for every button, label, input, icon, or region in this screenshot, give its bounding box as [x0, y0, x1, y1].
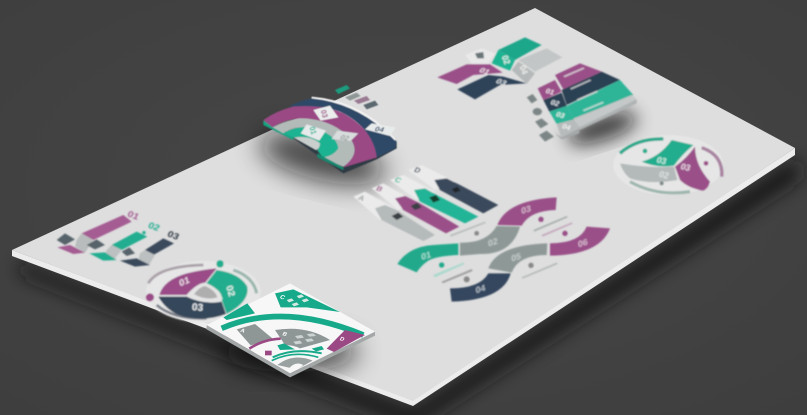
segment 01 teal	[283, 127, 338, 157]
tab A: A	[356, 194, 367, 203]
ribbon icons	[392, 187, 461, 220]
concentric arcs	[273, 351, 322, 357]
purple band	[249, 339, 281, 349]
markers	[146, 293, 154, 301]
segment 03 purple	[497, 197, 557, 226]
segment 01 teal	[397, 243, 458, 272]
teal corner left	[223, 303, 255, 320]
fan chart infographic	[263, 85, 397, 173]
shadow: fan chart	[255, 121, 389, 195]
fan side	[263, 121, 397, 173]
center triangle	[187, 283, 223, 301]
teal arc	[222, 316, 363, 335]
tab B	[372, 183, 415, 210]
panel: gray 04: 04	[517, 64, 531, 76]
step 03: 03	[165, 229, 181, 242]
gray segment A: A	[239, 328, 246, 334]
segment 02 gray: 02	[488, 236, 498, 249]
panel: navy 03: 03	[494, 77, 510, 87]
card with white background	[207, 283, 375, 377]
small blocks behind fan	[335, 85, 378, 109]
panel: purple 01: 01	[477, 66, 493, 76]
tab D	[408, 165, 455, 190]
segment 02 gray	[273, 118, 355, 167]
gray segment B	[275, 329, 330, 348]
circular infographic right	[613, 135, 723, 195]
purple D	[327, 330, 365, 352]
icon: top gears	[465, 48, 495, 63]
teal corner C: C	[278, 294, 287, 301]
right bars	[555, 63, 602, 89]
segment 02 teal: 02	[223, 284, 237, 299]
bottom teal chips	[277, 343, 295, 350]
segment 01 purple: 01	[178, 274, 191, 289]
segment 06 purple: 06	[578, 237, 588, 249]
circular infographic left	[146, 260, 261, 322]
step 01: 01	[125, 209, 141, 223]
segment 03 purple: 03	[521, 203, 531, 216]
stacked block infographic	[527, 63, 637, 142]
icons: gray glyphs	[527, 94, 554, 142]
label 02: 02	[338, 133, 351, 142]
pale disk	[146, 261, 261, 322]
gray segment A	[237, 324, 273, 345]
gray segment B: B	[281, 332, 288, 338]
left steps: 04	[560, 122, 573, 132]
segment 05 gray	[488, 243, 547, 273]
segment 04 navy	[288, 98, 397, 157]
segment 05 gray: 05	[511, 251, 521, 264]
segment 03 purple	[263, 106, 377, 167]
segment 02 gray	[460, 226, 520, 256]
shadow: card	[222, 332, 358, 372]
segment 04 navy: 04	[475, 283, 486, 295]
purple D: D	[338, 337, 345, 343]
label 04: 04	[373, 125, 387, 134]
purple square	[265, 351, 272, 355]
ribbon A gray	[375, 205, 435, 241]
block side	[573, 99, 637, 130]
S-curve infographic	[397, 197, 610, 302]
ribbon D navy	[434, 178, 498, 213]
pale disk	[613, 135, 723, 195]
segment 04 navy	[450, 273, 511, 302]
left stair infographic	[57, 209, 181, 267]
plate shadow	[20, 158, 800, 415]
card face	[207, 283, 375, 373]
step 02: 02	[146, 221, 161, 234]
captions and markers	[433, 216, 573, 283]
teal corner C	[275, 289, 340, 312]
tab C	[390, 175, 435, 200]
bar captions	[563, 67, 604, 111]
tab A	[353, 192, 398, 220]
segment 02 gray: 02	[658, 169, 670, 181]
ribbon B purple	[395, 196, 459, 233]
ribbon infographic	[353, 165, 498, 241]
panel: teal 02: 02	[500, 54, 513, 66]
center gray	[294, 137, 320, 150]
segment 01 purple: 03	[679, 161, 692, 173]
shadow: stacked block	[564, 105, 640, 151]
segment 06 purple	[550, 227, 610, 256]
left steps: 01	[544, 87, 556, 97]
markers	[643, 149, 647, 153]
tab B: B	[374, 184, 385, 194]
card side	[207, 325, 375, 377]
outer rings	[620, 139, 663, 153]
left steps: 03	[554, 110, 566, 120]
segment 01 teal: 01	[421, 249, 431, 262]
tab C: C	[393, 176, 403, 185]
ribbon C teal	[414, 188, 478, 223]
top-right folded infographic	[437, 37, 562, 99]
left steps: 02	[549, 98, 561, 108]
segment 03 navy: 03	[191, 302, 204, 314]
label 03: 03	[319, 109, 330, 119]
outer rings	[148, 265, 203, 283]
left steps	[538, 80, 579, 137]
segment 03 teal: 03	[655, 155, 668, 166]
tab D: D	[412, 166, 423, 175]
label 01: 01	[307, 125, 319, 135]
